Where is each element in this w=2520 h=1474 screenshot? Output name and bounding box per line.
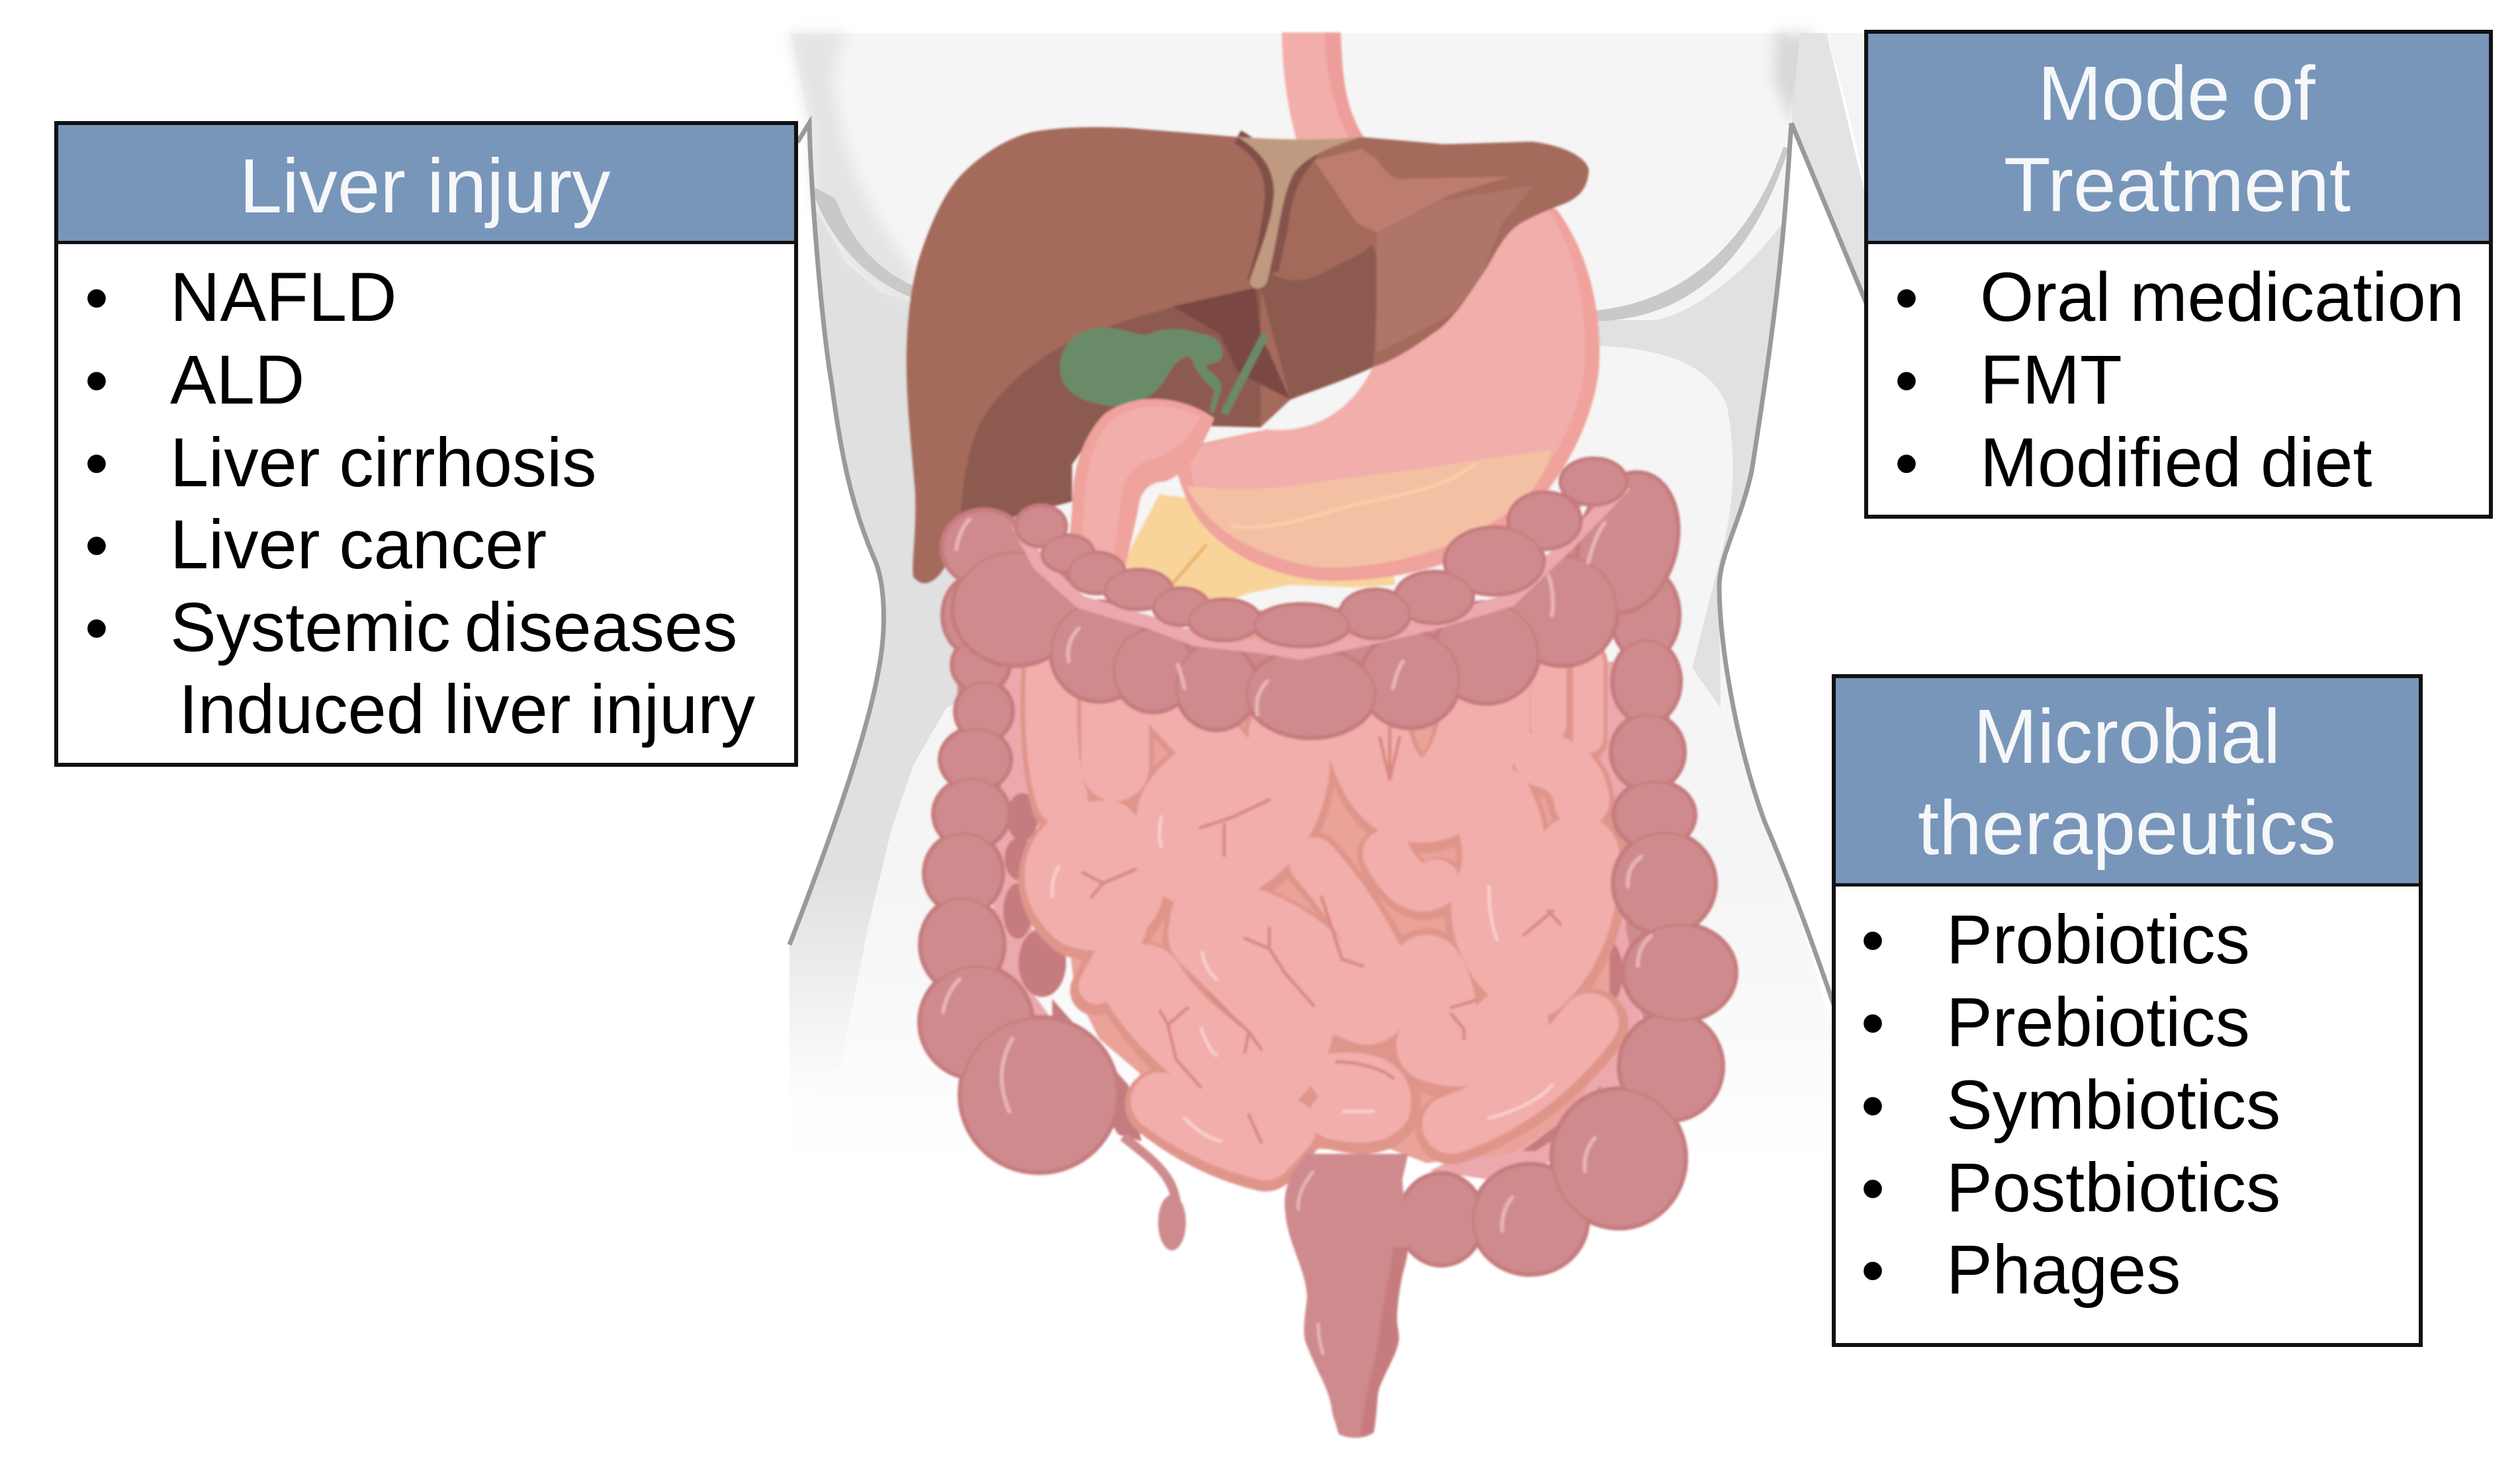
list: therapeutics: •: [1861, 1068, 1885, 1143]
transverse colon: [943, 459, 1691, 737]
list: therapeutics: •: [1861, 902, 1885, 978]
list: therapeutics: Prebiotics: [1946, 984, 2250, 1061]
appendix: [1123, 1137, 1186, 1250]
mode of treatment body: [1866, 32, 2491, 517]
list: therapeutics: [1861, 901, 2280, 1309]
list: treatment modes: •: [1895, 343, 1918, 418]
heading text: Microbial: [1973, 693, 2280, 779]
torso fill: [789, 33, 1848, 1164]
list: liver injury: •: [85, 425, 109, 501]
list: liver injury: Induced liver injury: [179, 671, 756, 748]
left breast shading: [789, 33, 915, 311]
gallbladder: [1060, 327, 1265, 413]
body silhouette: [789, 33, 1866, 1164]
list: treatment modes: •: [1895, 425, 1918, 501]
list: therapeutics: Postbiotics: [1946, 1149, 2280, 1227]
stomach: [1171, 192, 1599, 581]
list: therapeutics: •: [1861, 1150, 1885, 1226]
list: therapeutics: Probiotics: [1946, 901, 2250, 978]
pancreas: [1122, 494, 1395, 603]
intestine loops outlines: [1051, 662, 1593, 1156]
list: therapeutics: •: [1861, 1233, 1885, 1308]
heading text line 2: therapeutics: [1918, 785, 2336, 871]
list: liver injury: NAFLD: [170, 259, 397, 336]
body outlines: [789, 123, 1866, 1012]
ascending colon and cecum: [921, 577, 1117, 1172]
esophagus: [1282, 32, 1367, 142]
header rule: [56, 241, 796, 244]
intestine highlights: [1052, 817, 1552, 1141]
header rule: [1866, 241, 2491, 244]
heading text line 2: Treatment: [2004, 142, 2351, 228]
list: therapeutics: Symbiotics: [1946, 1066, 2280, 1144]
mesentery and deep colon lobes: [993, 662, 1641, 1184]
panel: microbial therapeutics: [1834, 676, 2421, 1345]
list: liver injury: •: [85, 260, 109, 335]
list: liver injury: •: [85, 343, 109, 418]
heading: microbial therapeutics: [1836, 678, 2419, 885]
small intestine: [1022, 629, 1609, 1180]
intestine folds: [1083, 728, 1560, 1143]
header rule: [1834, 883, 2421, 887]
liver: falciform ligament: [1238, 137, 1361, 288]
microbial therapeutics body: [1834, 676, 2421, 1345]
right arm: [1791, 33, 1866, 304]
list: therapeutics: Phages: [1946, 1231, 2181, 1309]
panel: mode of treatment: [1866, 32, 2491, 517]
liver: shaded left lobe: [1261, 158, 1379, 400]
list: liver injury: Systemic diseases: [170, 589, 737, 666]
list: treatment modes: Modified diet: [1980, 424, 2372, 501]
list: liver injury: ALD: [170, 341, 304, 419]
intestine loops fill: [1051, 662, 1590, 1151]
heading: liver injury: [58, 125, 794, 243]
list: treatment modes: [1895, 259, 2464, 501]
rectum: [1284, 1154, 1408, 1438]
list: treatment modes: FMT: [1980, 341, 2122, 419]
panel: liver injury: [56, 123, 796, 765]
descending colon: [1400, 570, 1735, 1274]
heading: mode of treatment: [1868, 34, 2489, 243]
list: therapeutics: •: [1861, 985, 1885, 1061]
heading text: Liver injury: [240, 143, 610, 229]
stomach vessels: [1231, 463, 1476, 527]
list: liver injury: Liver cancer: [170, 506, 547, 584]
list: liver injury: •: [85, 590, 109, 666]
list: liver injury: Liver cirrhosis: [170, 424, 597, 501]
heading text: Mode of: [2038, 50, 2316, 136]
left side shadow: [789, 123, 1032, 1111]
right breast shading: [1588, 147, 1789, 322]
colon highlights: [943, 519, 1651, 1231]
list: treatment modes: •: [1895, 260, 1918, 335]
organs illustration: [907, 32, 1735, 1438]
duodenum: [1065, 399, 1214, 582]
list: treatment modes: Oral medication: [1980, 259, 2464, 336]
liver: shaded lower lobe: [960, 288, 1261, 539]
list: liver injury: [85, 259, 756, 748]
liver injury body: [56, 123, 796, 765]
liver: [907, 127, 1589, 584]
list: liver injury: •: [85, 507, 109, 583]
right side shadow: [1588, 220, 1785, 708]
stomach: pancreas seen through: [1187, 450, 1552, 568]
